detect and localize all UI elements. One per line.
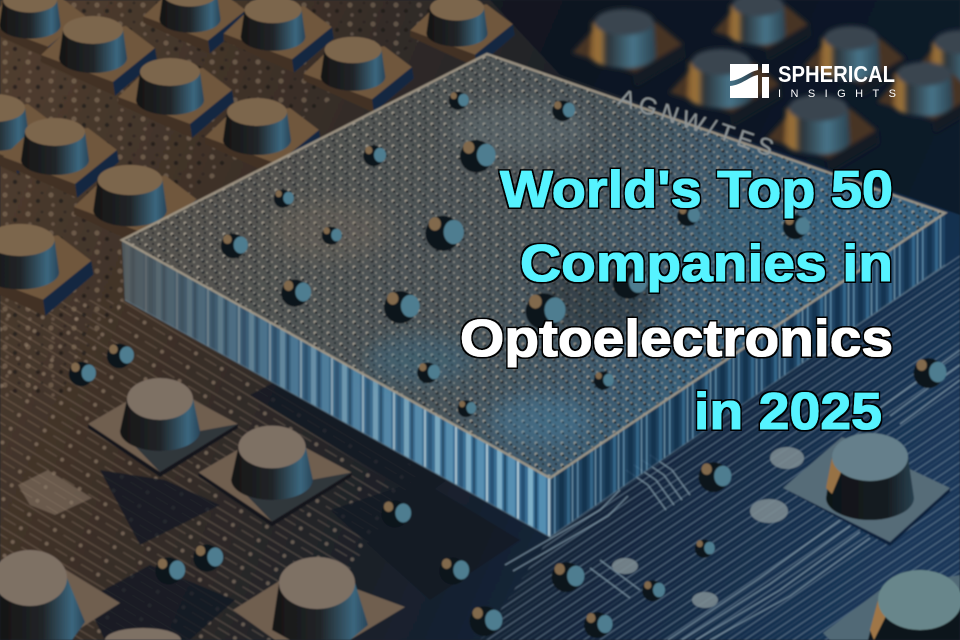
- title: [460, 161, 893, 441]
- components: lower-right caps: [783, 433, 960, 640]
- title line 2: Companies in: [520, 235, 893, 293]
- title line 4: in 2025: [694, 383, 882, 441]
- title line 1: World's Top 50: [500, 161, 893, 219]
- cap bottom edge sliver: [105, 628, 181, 640]
- slab left side: [122, 240, 550, 537]
- tan patch left: [18, 470, 92, 515]
- components: upper-left caps: [0, 0, 515, 316]
- title line 3: Optoelectronics: [460, 310, 893, 368]
- cap bottom centre: [233, 557, 405, 640]
- slab tonal blotches: [270, 102, 830, 445]
- logo wordmark: SPHERICAL: [778, 61, 895, 87]
- trace bundles lower right: [505, 350, 960, 640]
- glass slab: [122, 54, 945, 537]
- pad and cap bottom right: [823, 570, 960, 640]
- dark board patches: [85, 345, 520, 640]
- light pads lower right: [612, 447, 804, 608]
- slab label text: AGNW/TES: [615, 84, 777, 162]
- components: lower-left caps: [0, 378, 405, 640]
- small board beads: [69, 344, 946, 638]
- speckle: upper left board: [0, 0, 480, 400]
- slab speckle: [122, 54, 945, 478]
- traces: blue right region: [480, 255, 960, 640]
- slab edges: [122, 54, 945, 478]
- dark navy band top right: [490, 0, 960, 215]
- slab top face: [122, 54, 945, 478]
- logo mark: [730, 64, 769, 98]
- logo: Spherical Insights: [730, 61, 896, 100]
- pad and cap right: [783, 433, 950, 546]
- slab large beads: [221, 92, 810, 417]
- slab right side: [550, 213, 945, 537]
- components: upper-right caps: [572, 0, 960, 172]
- slab left side fade: [122, 240, 550, 537]
- cap bottom left edge: [0, 550, 120, 640]
- traces: brown left region: [0, 300, 420, 640]
- logo tagline: INSIGHTS: [778, 88, 896, 100]
